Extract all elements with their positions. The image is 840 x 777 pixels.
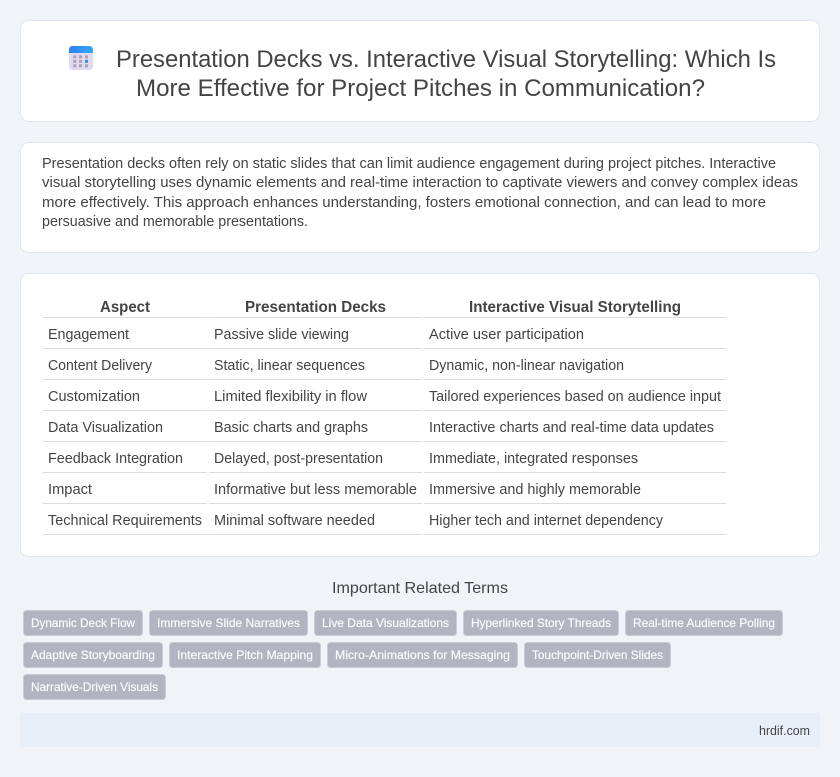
title (116, 46, 776, 102)
row: engagement (48, 327, 584, 343)
tag: Interactive Pitch Mapping (177, 648, 313, 662)
row: data visualization: Basic charts and graphs (214, 420, 368, 436)
row: customization: Tailored experiences based on audience input (429, 389, 721, 405)
row: customization: Customization (48, 389, 140, 405)
tag (24, 610, 142, 636)
row: technical requirements (48, 513, 664, 529)
footer: hrdif.com (759, 723, 810, 738)
tag: Immersive Slide Narratives (157, 616, 300, 630)
tag (24, 674, 166, 700)
row: feedback integration: Feedback Integration (48, 451, 183, 467)
row: impact (48, 482, 641, 498)
table header: Interactive Visual Storytelling (469, 299, 681, 316)
row: technical requirements: Minimal software needed (214, 513, 375, 529)
tag (524, 642, 670, 668)
tag: Dynamic Deck Flow (31, 616, 135, 630)
row: technical requirements: Technical Requirements (48, 513, 202, 529)
table header: Aspect (100, 299, 150, 316)
tag (328, 642, 518, 668)
icon: calendar (69, 46, 93, 70)
related term tags (24, 610, 782, 700)
tag: Real-time Audience Polling (633, 616, 775, 630)
tag: Live Data Visualizations (322, 616, 449, 630)
row: content delivery: Dynamic, non-linear navigation (429, 358, 624, 374)
row: technical requirements: Higher tech and internet dependency (429, 513, 664, 529)
row: data visualization: Data Visualization (48, 420, 163, 436)
panel: introduction text: visual storytelling uses dynamic elements and real-time interaction to captivate viewers and convey complex ideas (42, 175, 798, 191)
heading: important related terms: Important Related Terms (332, 580, 508, 597)
row: feedback integration: Delayed, post-presentation (214, 451, 383, 467)
row: engagement: Active user participation (429, 327, 584, 343)
row: data visualization (48, 420, 714, 436)
row: engagement: Engagement (48, 327, 129, 343)
row: data visualization: Interactive charts and real-time data updates (429, 420, 714, 436)
row: impact: Impact (48, 482, 92, 498)
panel: title card (20, 20, 820, 122)
panel: introduction text: persuasive and memorable presentations. (42, 214, 308, 230)
row: impact: Informative but less memorable (214, 482, 417, 498)
row: customization (48, 389, 721, 405)
tag: Hyperlinked Story Threads (471, 616, 611, 630)
row: content delivery: Content Delivery (48, 358, 153, 374)
row: engagement: Passive slide viewing (214, 327, 349, 343)
tag (626, 610, 782, 636)
tag (464, 610, 618, 636)
row: feedback integration (48, 451, 638, 467)
tag: Touchpoint-Driven Slides (532, 648, 663, 662)
panel: introduction text (20, 142, 820, 252)
tag (24, 642, 162, 668)
row: customization: Limited flexibility in flow (214, 389, 368, 405)
panel: comparison table (20, 274, 820, 556)
table header: Presentation Decks (245, 299, 386, 316)
panel: introduction text: Presentation decks often rely on static slides that can limit audience engagement during project pitches. Interactive (42, 156, 776, 172)
row: impact: Immersive and highly memorable (429, 482, 641, 498)
row: feedback integration: Immediate, integrated responses (429, 451, 638, 467)
footer (20, 713, 820, 747)
title: Presentation Decks vs. Interactive Visual Storytelling: Which Is (116, 46, 776, 73)
tag (150, 610, 308, 636)
tag: Narrative-Driven Visuals (31, 680, 158, 694)
tag: Adaptive Storyboarding (31, 648, 155, 662)
tag: Micro-Animations for Messaging (335, 648, 510, 662)
panel: introduction text: more effectively. This approach enhances understanding, fosters emotional connection, and can lead to more (42, 195, 766, 211)
row: content delivery (48, 358, 624, 374)
title: More Effective for Project Pitches in Communication? (136, 75, 705, 102)
tag (170, 642, 320, 668)
table header (100, 299, 681, 316)
row: content delivery: Static, linear sequences (214, 358, 365, 374)
tag (314, 610, 456, 636)
